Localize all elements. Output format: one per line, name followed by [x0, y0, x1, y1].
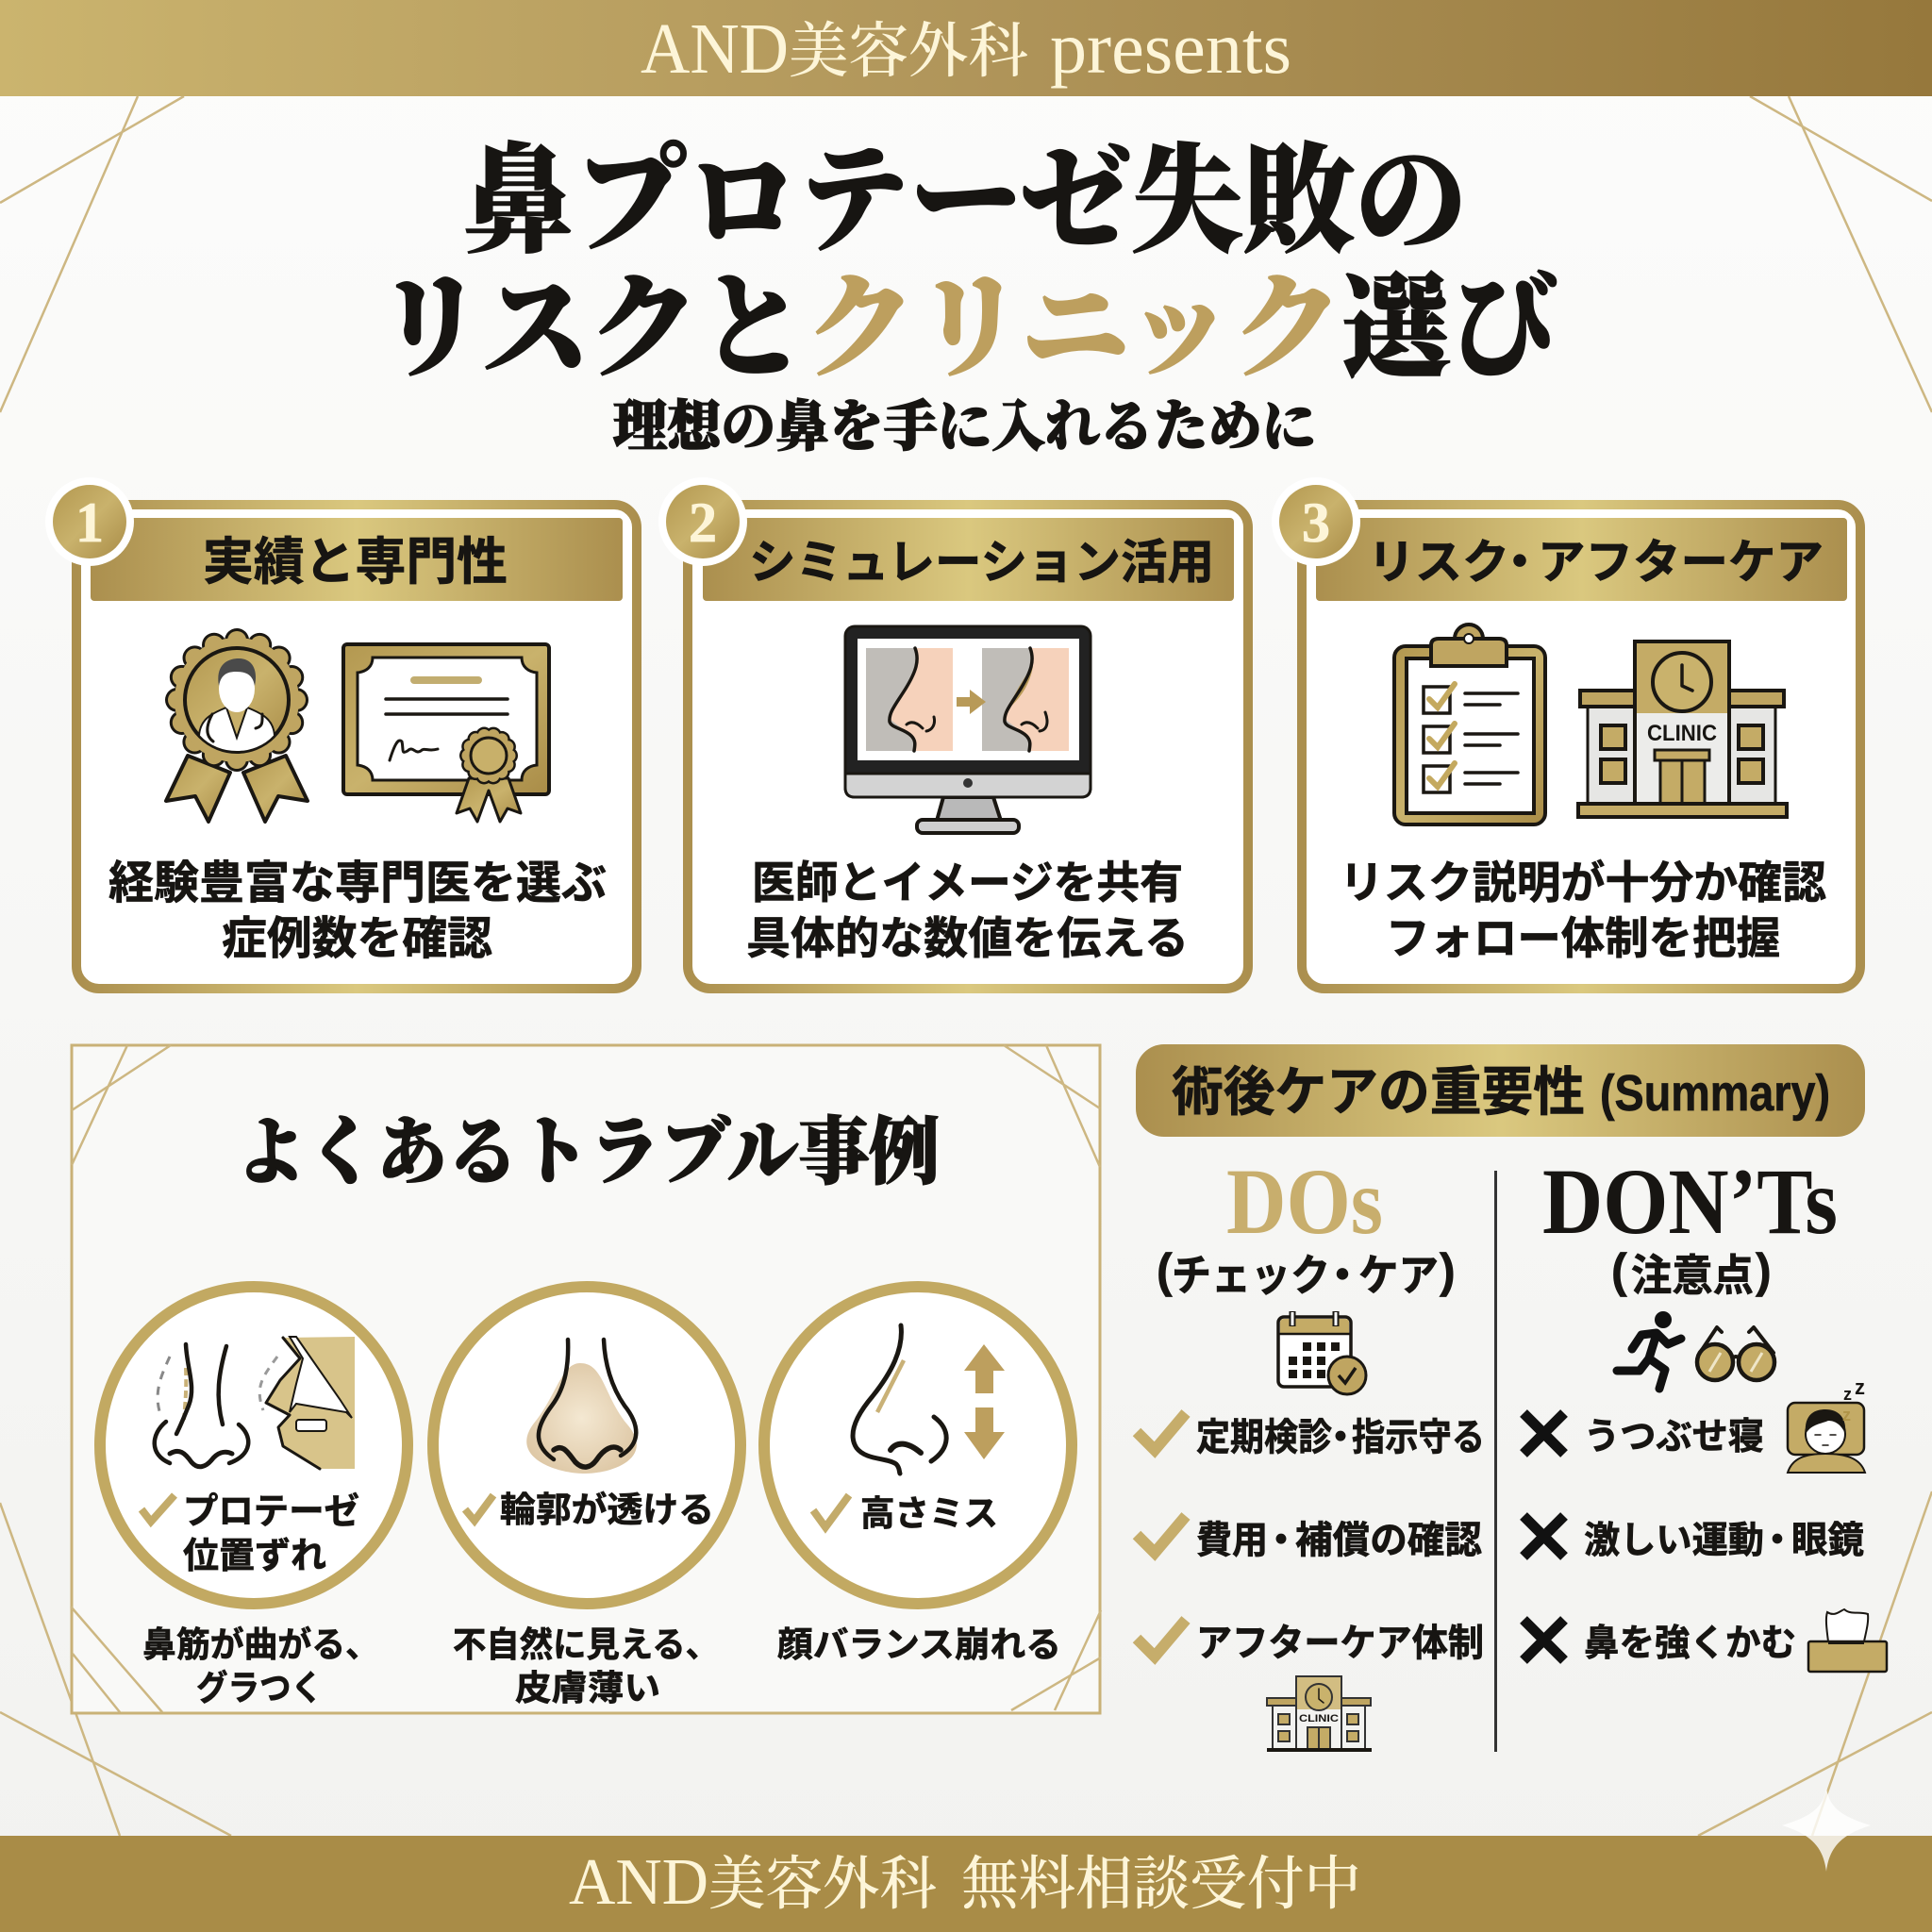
icon: nose profile with arrows	[853, 1325, 1005, 1474]
card 1 header	[91, 518, 623, 601]
panel: common troubles	[71, 1045, 1101, 1713]
number badge 1	[45, 477, 134, 566]
DOs heading: ケア	[1358, 1251, 1439, 1300]
icon: calendar	[1278, 1311, 1366, 1394]
trouble 2: outline visible	[433, 1287, 741, 1604]
panel: post-op care summary	[1136, 1044, 1887, 1752]
card 3 text	[1340, 858, 1826, 963]
DON'Ts list: 激しい運動	[1584, 1521, 1764, 1561]
icon: clinic building	[1578, 641, 1787, 817]
icon: sleeping face: z	[1843, 1385, 1852, 1404]
banner text: 美容外科	[789, 18, 1028, 85]
icon: sleeping face: z	[1842, 1406, 1851, 1424]
number badge 2	[658, 477, 747, 566]
number badge 3	[1272, 477, 1360, 566]
icon: doctor medal	[166, 638, 308, 822]
DON'Ts heading: 注意点	[1631, 1251, 1754, 1300]
summary header: 術後ケアの重要性	[1172, 1062, 1585, 1122]
label: 輪郭が透ける	[500, 1491, 714, 1529]
divider	[1494, 1171, 1497, 1752]
banner text: presents	[1050, 7, 1291, 89]
card 3 header: ・	[1496, 536, 1543, 589]
label: 位置ずれ	[183, 1537, 326, 1576]
trouble descriptions	[142, 1625, 1061, 1707]
icon: certificate	[343, 644, 549, 822]
trouble descriptions: 鼻筋が曲がる、	[142, 1625, 379, 1664]
card 1 text	[108, 858, 607, 964]
number badge 1: 1	[75, 491, 104, 554]
card 2 text	[746, 858, 1189, 963]
main title: 鼻プロテーゼ失敗の	[462, 138, 1467, 268]
subtitle: 理想の鼻を手に入れるために	[613, 396, 1316, 458]
icon: shifted nose	[155, 1337, 355, 1469]
DOs list: 費用	[1196, 1520, 1268, 1561]
label: 高さミス	[860, 1494, 998, 1533]
icon: checklist clipboard	[1394, 625, 1545, 824]
icon: runner	[1617, 1311, 1681, 1389]
DON'Ts list: うつぶせ寝	[1584, 1417, 1764, 1457]
DOs list: 指示守る	[1352, 1417, 1485, 1458]
DON'Ts heading: )	[1756, 1244, 1772, 1297]
DOs list: 補償の確認	[1295, 1520, 1482, 1561]
icon: small clinic	[1267, 1676, 1372, 1752]
icon: tissue box	[1808, 1609, 1887, 1672]
DOs list	[1137, 1413, 1485, 1664]
card 2 text: 医師とイメージを共有	[752, 858, 1183, 908]
panel: card 1	[45, 477, 637, 989]
DON'Ts list: 眼鏡	[1791, 1521, 1864, 1561]
icon: sleeping face: z	[1855, 1375, 1865, 1399]
DON'Ts list: 鼻を強くかむ	[1584, 1624, 1796, 1664]
card 3 header: リスク	[1368, 536, 1509, 589]
summary header: (Summary)	[1600, 1065, 1830, 1122]
card 3 text: フォロー体制を把握	[1386, 913, 1780, 963]
banner text: 美容外科	[708, 1853, 937, 1917]
number badge 3: 3	[1302, 491, 1330, 554]
label: プロテーゼ	[183, 1492, 359, 1532]
sparkle	[1782, 1788, 1871, 1872]
DOs list: ・	[1322, 1417, 1359, 1458]
banner text: AND	[569, 1846, 708, 1919]
trouble descriptions: 顔バランス崩れる	[777, 1625, 1061, 1664]
DOs list: 定期検診	[1196, 1417, 1332, 1458]
DOs list: ・	[1262, 1520, 1300, 1561]
DOs list: アフターケア体制	[1196, 1623, 1484, 1664]
panel: card 3	[1272, 477, 1860, 989]
card 2 text: 具体的な数値を伝える	[746, 913, 1189, 963]
trouble descriptions: グラつく	[196, 1669, 323, 1707]
DON'Ts heading: (	[1611, 1244, 1627, 1297]
bottom banner	[0, 1836, 1932, 1932]
trouble descriptions: 皮膚薄い	[515, 1669, 660, 1707]
card 1 text: 症例数を確認	[222, 914, 492, 964]
icon: small clinic: CLINIC	[1299, 1713, 1339, 1724]
banner text: AND	[641, 9, 789, 89]
card 3 text: リスク説明が十分か確認	[1340, 858, 1826, 908]
banner text: 無料相談受付中	[961, 1853, 1361, 1917]
card 2 header: シミュレーション活用	[749, 536, 1214, 589]
banner text	[569, 1846, 1361, 1919]
icon: monitor with nose simulation	[845, 626, 1091, 833]
main title: リスクとクリニック選び	[375, 266, 1558, 391]
DOs heading	[1157, 1149, 1456, 1300]
card 2 header	[703, 518, 1234, 601]
main title	[375, 138, 1558, 391]
DOs heading: )	[1440, 1244, 1456, 1297]
panel: card 2	[658, 477, 1248, 989]
label	[142, 1492, 359, 1576]
DON'Ts list	[1524, 1413, 1864, 1664]
card 3 header	[1316, 518, 1847, 601]
icon: glasses	[1697, 1327, 1774, 1380]
DON'Ts list: ・	[1758, 1521, 1796, 1561]
banner text	[641, 7, 1291, 89]
number badge 2: 2	[689, 491, 717, 554]
top banner	[0, 0, 1932, 96]
DOs heading: DOs	[1226, 1149, 1383, 1254]
icon: clinic building: CLINIC	[1647, 721, 1717, 746]
trouble 1: prosthesis shift	[100, 1287, 408, 1604]
summary header	[1136, 1044, 1865, 1137]
DOs heading: (	[1157, 1244, 1173, 1297]
card 1 header: 実績と専門性	[203, 534, 508, 591]
trouble 3: height mistake	[764, 1287, 1072, 1604]
trouble descriptions: 不自然に見える、	[453, 1625, 719, 1664]
card 1 text: 経験豊富な専門医を選ぶ	[108, 858, 607, 908]
icon: sleeping face	[1788, 1375, 1865, 1473]
panel heading: よくあるトラブル事例	[236, 1111, 940, 1193]
DON'Ts heading	[1542, 1149, 1838, 1300]
DOs heading: ・	[1321, 1251, 1364, 1300]
card 3 header: アフターケア	[1538, 536, 1824, 589]
DON'Ts heading: DON’Ts	[1542, 1149, 1838, 1254]
DOs heading: チェック	[1172, 1251, 1330, 1300]
icon: nose outline	[526, 1340, 637, 1474]
